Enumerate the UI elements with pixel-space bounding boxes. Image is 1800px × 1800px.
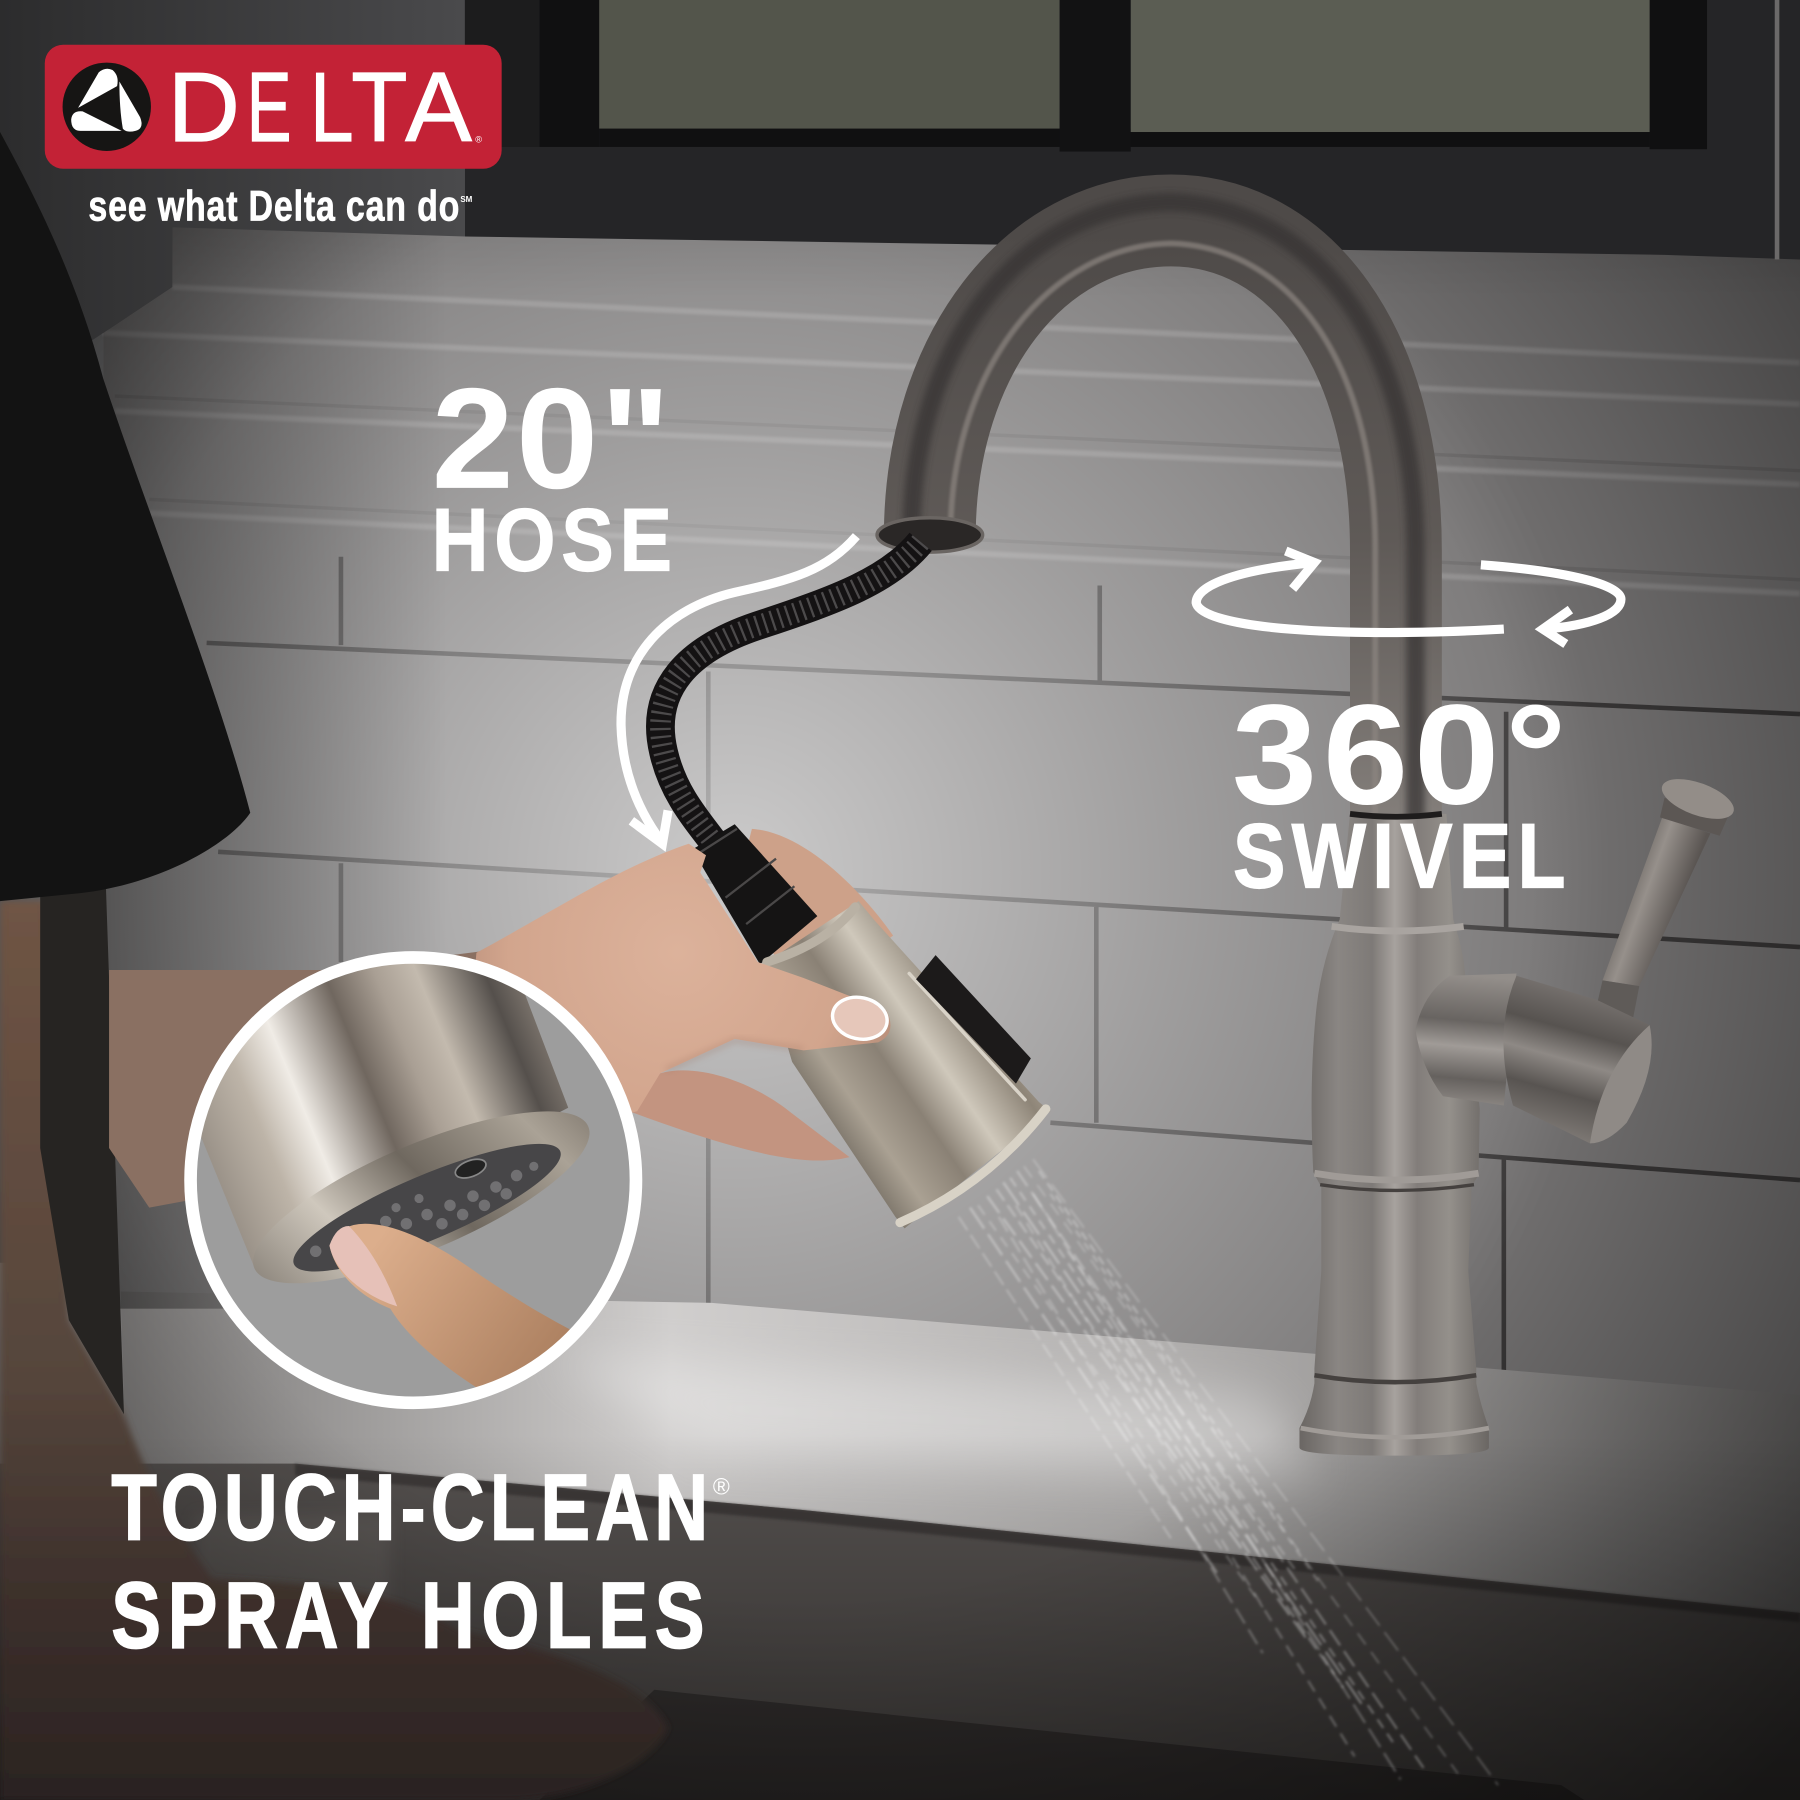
water spray bbox=[959, 1159, 1498, 1785]
nozzle button edge bbox=[202, 1131, 239, 1208]
wordmark: E bbox=[247, 52, 292, 162]
heading: Touch-Clean spray holes: TOUCH-CLEAN bbox=[111, 1454, 708, 1559]
tagline: see what Delta can do bbox=[88, 183, 459, 230]
heading: 360 swivel: SWIVEL bbox=[1233, 805, 1566, 908]
heading: 20 inch hose bbox=[432, 358, 672, 590]
arrow: 360 swivel bbox=[1196, 551, 1621, 644]
nozzle center bbox=[454, 1158, 487, 1179]
hand: palm and thumb bbox=[459, 844, 891, 1159]
heading: 360 swivel: 360° bbox=[1232, 676, 1567, 834]
tile grout lines bbox=[207, 557, 1800, 1372]
handle neck bbox=[1596, 980, 1639, 1022]
spray holes bbox=[310, 1162, 538, 1257]
heading: 20 inch hose: 20" bbox=[432, 358, 670, 518]
heading: Touch-Clean spray holes bbox=[111, 1454, 730, 1667]
wordmark: L bbox=[310, 52, 354, 162]
person: torso and arm bbox=[0, 132, 668, 1800]
wordmark: T bbox=[351, 52, 408, 162]
wordmark bbox=[168, 52, 472, 162]
spray face bbox=[293, 1144, 561, 1272]
heading: Touch-Clean spray holes: SPRAY HOLES bbox=[111, 1562, 704, 1667]
faucet body bbox=[1299, 814, 1489, 1456]
fingernail bbox=[329, 1226, 397, 1306]
braided hose bbox=[660, 542, 921, 847]
thumbnail bbox=[829, 992, 891, 1044]
spray button bbox=[916, 955, 1031, 1084]
tagline: SM bbox=[460, 195, 473, 204]
hand: rear fingers bbox=[629, 829, 893, 1161]
handle cap bbox=[1657, 771, 1739, 836]
logo mark bbox=[63, 63, 151, 151]
wordmark: A bbox=[405, 52, 472, 162]
faucet bbox=[877, 202, 1739, 1456]
Delta logo: ® bbox=[475, 134, 482, 144]
Delta logo bbox=[45, 45, 502, 169]
handle hub bbox=[1415, 973, 1516, 1105]
handle lever bbox=[1503, 976, 1651, 1143]
inset circle: Touch-Clean detail bbox=[184, 951, 642, 1410]
thumb shadow bbox=[666, 1040, 804, 1070]
heading: 360 swivel bbox=[1232, 676, 1567, 908]
arrow: hose bbox=[621, 536, 856, 844]
handle lever rod bbox=[1603, 817, 1710, 986]
metal sprayer cylinder bbox=[202, 964, 568, 1264]
connector ribs bbox=[696, 829, 794, 924]
connector bbox=[692, 824, 817, 964]
heading: 20 inch hose: HOSE bbox=[432, 490, 672, 590]
body rings bbox=[1301, 814, 1489, 1437]
handle lever end disc bbox=[1590, 1025, 1652, 1143]
metal rim bbox=[254, 1111, 590, 1283]
countertop bbox=[0, 1291, 1800, 1800]
wordmark: D bbox=[168, 52, 240, 162]
window frame and panes bbox=[465, 0, 1800, 259]
sprayer head bbox=[692, 824, 1050, 1228]
finger bbox=[330, 1224, 570, 1387]
spout bbox=[877, 202, 1415, 872]
upper left wall corner bbox=[0, 0, 465, 402]
rims bbox=[767, 907, 1046, 1223]
heading: Touch-Clean spray holes: ® bbox=[713, 1474, 730, 1500]
